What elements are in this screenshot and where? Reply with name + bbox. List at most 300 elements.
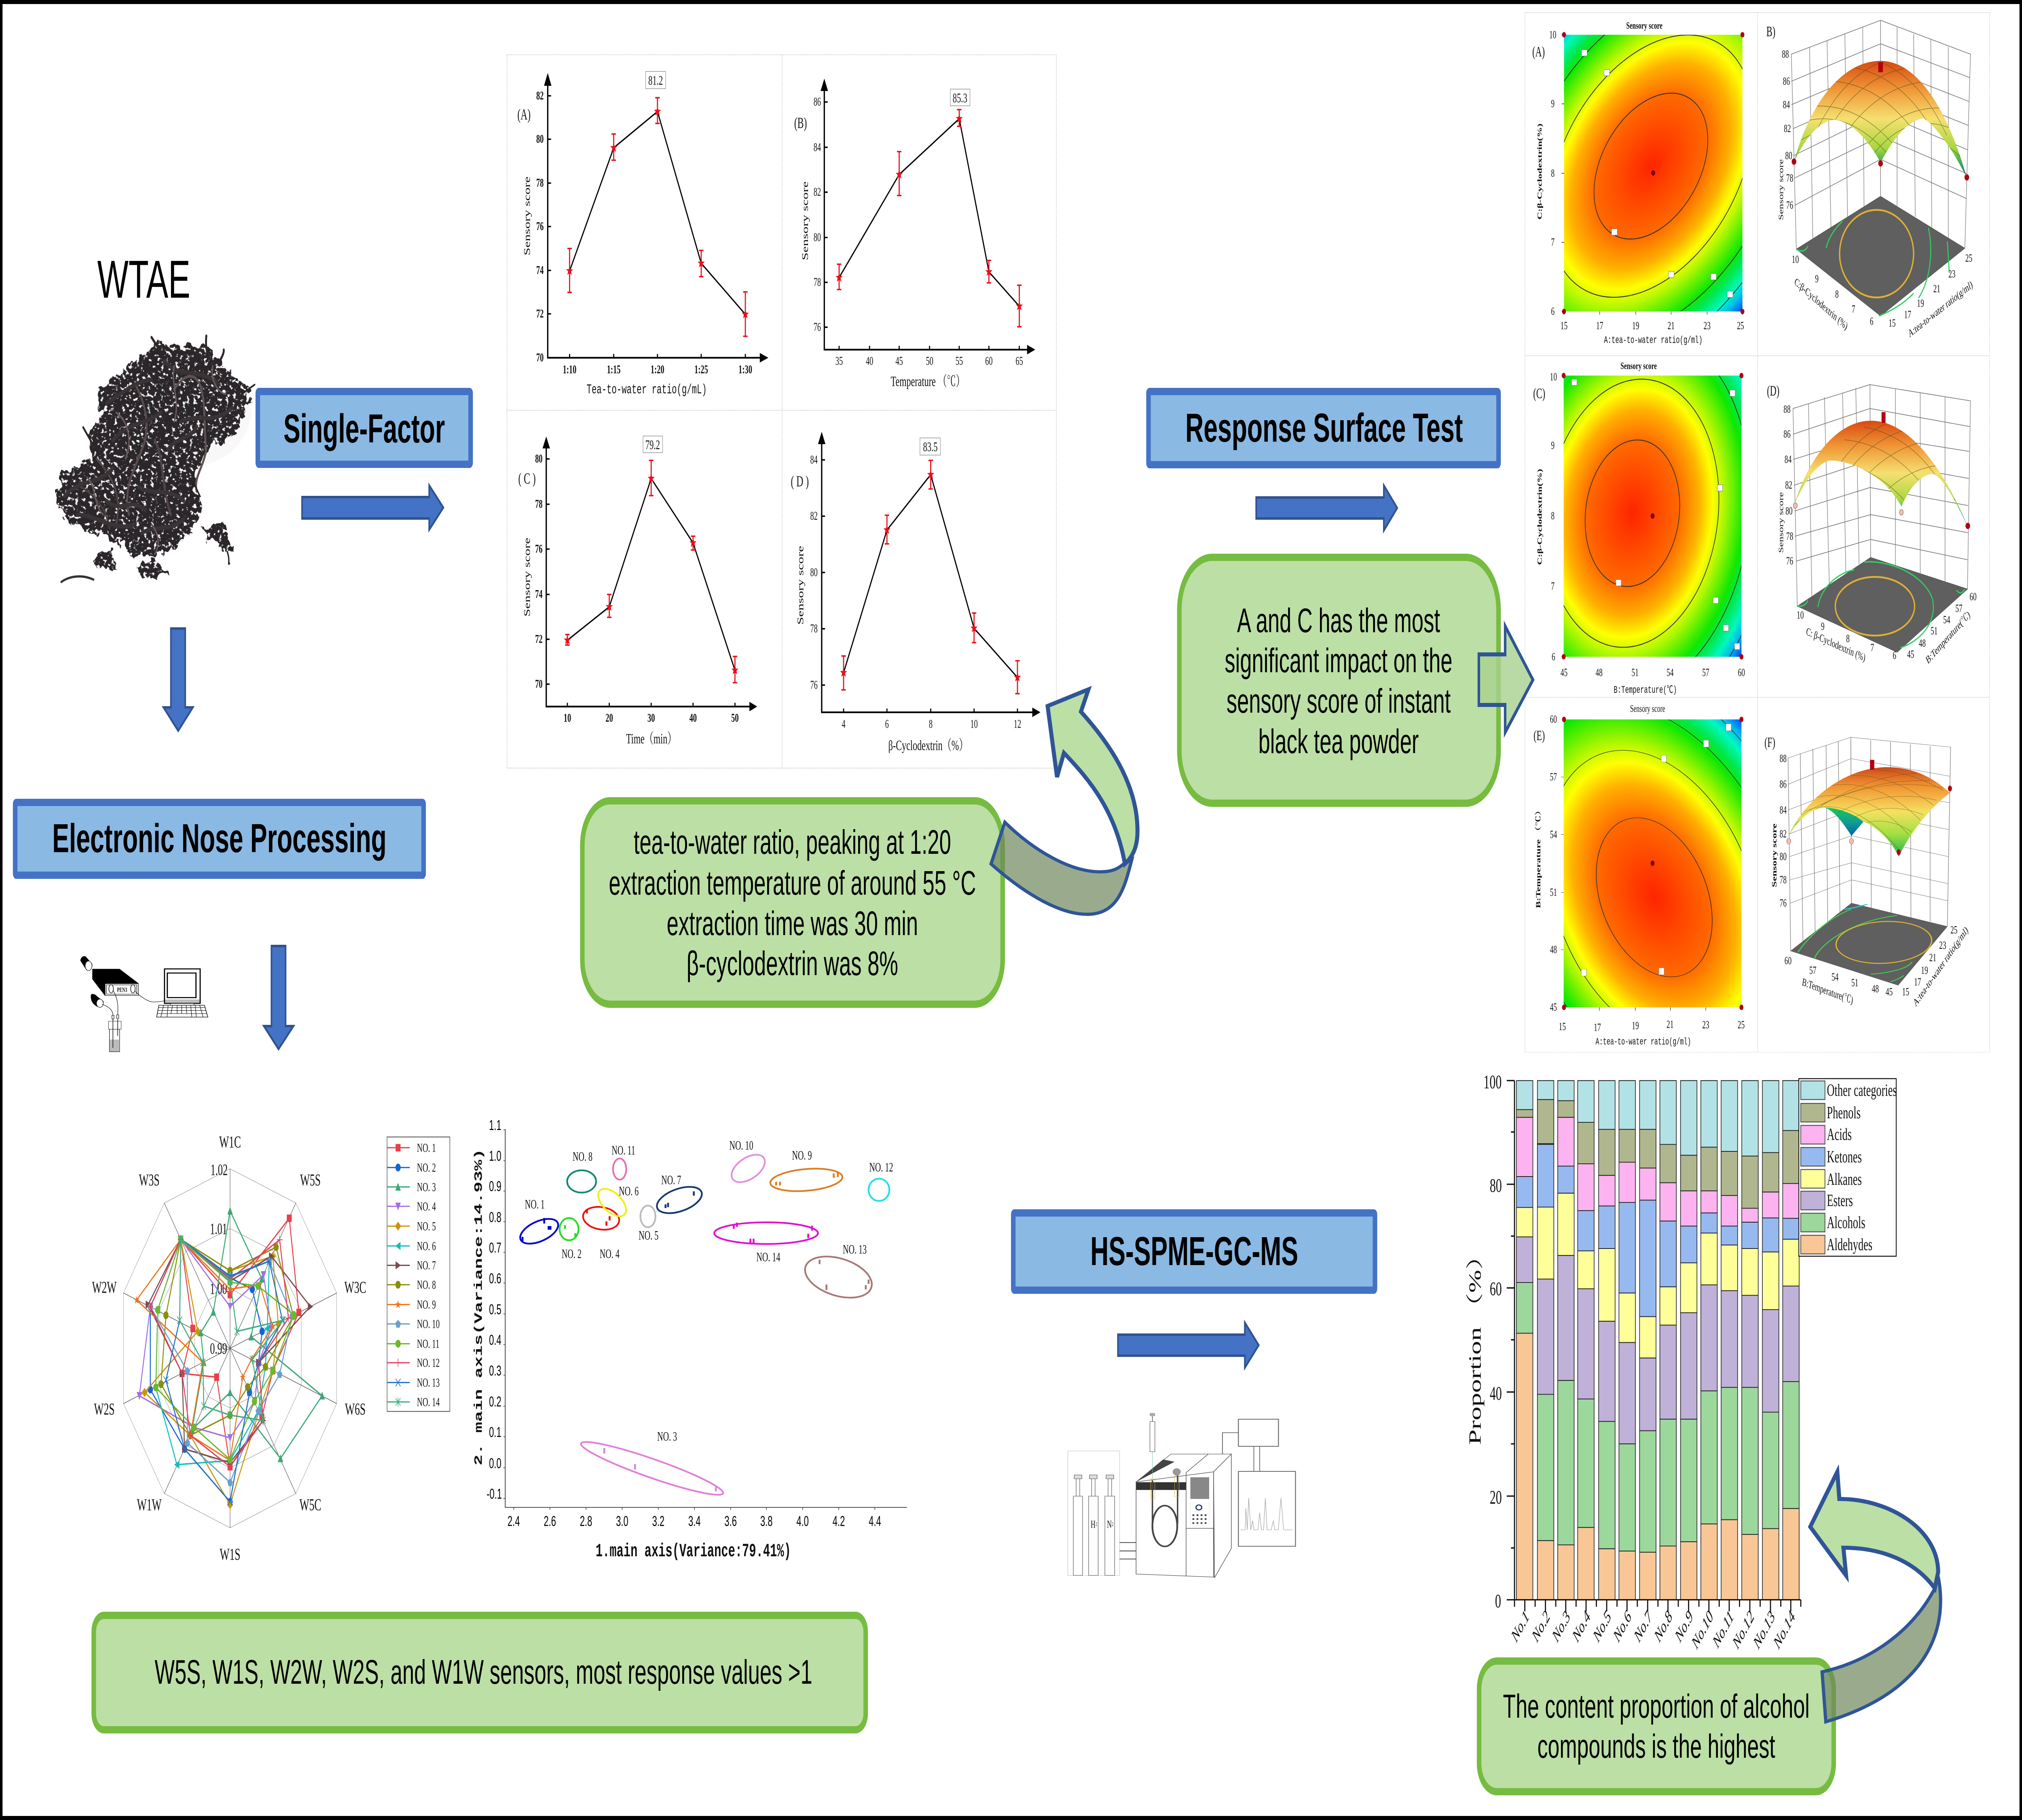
radar chart: electronic nose sensor response: W1W (137, 1496, 162, 1514)
contour plot A: (A) (1532, 44, 1545, 60)
radar chart: electronic nose sensor response: W1C (219, 1133, 241, 1151)
chart: stacked bar of compound proportions: No.5 (1590, 1607, 1614, 1646)
surface plot D: 80 (1785, 505, 1793, 517)
surface plot F: 25 (1950, 924, 1957, 936)
chart: PCA of electronic nose samples: NO. 8 (573, 1149, 592, 1164)
surface plot B: 82 (1784, 122, 1791, 135)
surface plot B (1766, 20, 1972, 330)
surface plot D: (D) (1767, 383, 1779, 399)
surface plot B: 86 (1783, 75, 1790, 87)
contour plot A: 7 (1551, 236, 1555, 249)
contour plot C: B:Temperature(℃) (1614, 685, 1677, 696)
surface plot D: 6 (1893, 649, 1896, 662)
surface plot F: 84 (1780, 804, 1787, 817)
contour plot A: 10 (1549, 28, 1556, 41)
chart: PCA of electronic nose samples: 2.8 (580, 1513, 592, 1529)
chart: PCA of electronic nose samples: NO. 14 (756, 1250, 780, 1264)
chart: PCA of electronic nose samples: 3.4 (688, 1513, 701, 1529)
chart D: beta-cyclodextrin: 76 (810, 679, 818, 692)
surface plot D: 78 (1786, 530, 1793, 543)
callout: response surface finding: black tea powder (1258, 722, 1419, 760)
chart D: beta-cyclodextrin: 6 (885, 717, 889, 731)
chart: PCA of electronic nose samples: NO. 11 (611, 1143, 635, 1158)
chart: stacked bar of compound proportions: No.6 (1610, 1606, 1634, 1646)
chart D: beta-cyclodextrin: 78 (810, 622, 818, 635)
chart: PCA of electronic nose samples: 0.7 (489, 1240, 501, 1256)
surface plot B: 76 (1786, 199, 1793, 212)
surface plot D: 86 (1783, 428, 1791, 440)
contour plot A: 8 (1551, 167, 1555, 180)
arrow: response surface (1256, 485, 1397, 531)
chart: PCA of electronic nose samples: 0.5 (489, 1302, 501, 1318)
radar chart: electronic nose sensor response: 1.01 (210, 1220, 227, 1237)
chart: stacked bar of compound proportions: 80 (1490, 1175, 1502, 1196)
surface plot F: 78 (1780, 874, 1787, 886)
contour plot E: 45 (1550, 1001, 1557, 1014)
legend: radar series: NO. 4 (417, 1199, 436, 1213)
surface plot B: 8 (1835, 288, 1839, 301)
heading: HS-SPME-GC-MS: HS-SPME-GC-MS (1090, 1229, 1298, 1274)
surface plot D: 57 (1955, 602, 1963, 615)
callout: alcohol compounds finding: compounds is the highest (1538, 1727, 1775, 1765)
chart C: time: 74 (535, 588, 543, 601)
surface plot D: 60 (1969, 590, 1977, 603)
chart A: tea-to-water ratio: 1:15 (607, 363, 620, 376)
contour plot A: A:tea-to-water ratio(g/ml) (1604, 335, 1703, 346)
chart A: tea-to-water ratio: 78 (536, 177, 544, 190)
legend: compound categories (1799, 1079, 1897, 1256)
chart: PCA of electronic nose samples: 0.6 (489, 1271, 501, 1287)
radar chart: electronic nose sensor response: W3C (345, 1278, 366, 1297)
chart: stacked bar of compound proportions: No.10 (1689, 1607, 1716, 1653)
chart B: temperature: 82 (814, 186, 821, 199)
contour plot E (1432, 641, 1877, 1154)
chart C: time: Time（min） (626, 731, 676, 747)
chart: PCA of electronic nose samples: 3.0 (616, 1513, 628, 1529)
axis titles for response surface plots: Sensory score (1770, 823, 1778, 887)
legend: radar series: NO. 2 (417, 1160, 436, 1175)
surface plot B: 6 (1870, 315, 1874, 328)
chart: PCA of electronic nose samples: 2. main axis(Variance:14.93%) (473, 1149, 485, 1465)
icon: GC-MS instrument: N2 (1107, 1519, 1114, 1530)
legend: compound categories: Other categories (1827, 1081, 1897, 1100)
chart B: temperature: 78 (814, 276, 821, 289)
surface plot D: 45 (1907, 648, 1914, 661)
surface plot B: 78 (1786, 172, 1793, 184)
chart: stacked bar of compound proportions (1466, 1071, 1897, 1653)
contour plot C: 51 (1631, 666, 1639, 679)
chart A: tea-to-water ratio: (A) (517, 106, 531, 123)
chart: PCA of electronic nose samples: 0.9 (489, 1179, 501, 1194)
contour plot A: 17 (1596, 320, 1603, 332)
legend: compound categories: Acids (1827, 1125, 1852, 1144)
axis titles for response surface plots: C: β-Cyclodextrin (%) (1805, 625, 1866, 664)
contour plot C: 60 (1738, 666, 1745, 679)
callout: sensor finding: W5S, W1S, W2W, W2S, and W1W sensors, most response values >1 (154, 1653, 812, 1691)
chart D: beta-cyclodextrin: ( D ) (791, 473, 809, 490)
surface plot D: 82 (1785, 479, 1792, 491)
chart D: beta-cyclodextrin: 82 (810, 510, 818, 523)
contour plot A: 23 (1704, 320, 1711, 332)
surface plot D (1767, 383, 1977, 662)
legend: radar series: NO. 9 (417, 1297, 436, 1312)
chart B: temperature: 80 (814, 231, 821, 244)
photo: pile of dried tea leaves (57, 336, 255, 582)
contour plot C: 48 (1595, 666, 1603, 679)
panel: single-factor line charts: Sensory score (800, 181, 810, 260)
legend: radar series: NO. 14 (417, 1395, 440, 1409)
icon: PEN3 electronic nose apparatus (80, 956, 208, 1052)
surface plot D: 76 (1786, 555, 1793, 567)
chart: PCA of electronic nose samples (473, 1117, 907, 1562)
chart: PCA of electronic nose samples: NO. 2 (562, 1246, 582, 1261)
chart C: time: 80 (535, 452, 543, 466)
legend: radar series: NO. 6 (417, 1239, 436, 1253)
chart A: tea-to-water ratio: 1:20 (651, 363, 664, 376)
surface plot F: 57 (1809, 964, 1816, 977)
chart: PCA of electronic nose samples: 0.4 (489, 1332, 501, 1348)
chart D: beta-cyclodextrin: 8 (929, 717, 933, 731)
contour plot E: 15 (1559, 1020, 1566, 1033)
chart: stacked bar of compound proportions: No.3 (1549, 1607, 1573, 1646)
surface plot F: 60 (1785, 954, 1791, 967)
surface plot B: 7 (1852, 303, 1855, 315)
chart D: beta-cyclodextrin: 83.5 (923, 439, 938, 454)
panel: single-factor line charts (507, 55, 1056, 768)
chart C: time: 10 (564, 711, 571, 725)
surface plot D: 48 (1919, 637, 1926, 650)
chart A: tea-to-water ratio: 1:10 (563, 363, 576, 376)
panel: response surface plots (1525, 12, 1990, 1052)
chart: stacked bar of compound proportions: 60 (1490, 1278, 1502, 1299)
chart: stacked bar of compound proportions: No.1 (1508, 1607, 1532, 1646)
surface plot B: 23 (1948, 268, 1955, 280)
chart: stacked bar of compound proportions: No.2 (1529, 1607, 1552, 1646)
legend: radar series: NO. 8 (417, 1278, 436, 1292)
callout: alcohol compounds finding: The content proportion of alcohol (1503, 1687, 1810, 1725)
axis titles for response surface plots: C:β-Cyclodextrin (%) (1793, 275, 1849, 332)
surface plot B: 25 (1965, 252, 1972, 265)
chart: PCA of electronic nose samples: NO. 6 (619, 1184, 639, 1198)
contour plot E: 17 (1594, 1021, 1601, 1034)
callout: single-factor findings: β-cyclodextrin was 8% (687, 944, 898, 982)
radar chart: electronic nose sensor response: 1.00 (210, 1280, 227, 1297)
chart: PCA of electronic nose samples: 0.0 (489, 1456, 501, 1471)
chart C: time: 30 (647, 711, 655, 725)
surface plot D: 54 (1943, 614, 1950, 626)
chart: PCA of electronic nose samples: 1.0 (489, 1148, 501, 1164)
chart: PCA of electronic nose samples: 1.1 (489, 1117, 501, 1133)
axis titles for response surface plots: B:Temperature(℃) (1801, 976, 1854, 1006)
surface plot F: 15 (1902, 986, 1909, 998)
surface plot F: 54 (1832, 971, 1839, 984)
contour plot A: 19 (1632, 320, 1639, 332)
chart: PCA of electronic nose samples: 4.2 (833, 1513, 845, 1529)
chart: stacked bar of compound proportions: No.12 (1730, 1607, 1757, 1653)
axis titles for response surface plots: A:tea-to-water ratio(g/ml) (1912, 924, 1969, 1009)
axis titles for response surface plots: A:tea-to-water ratio(g/ml) (1907, 278, 1974, 340)
chart A: tea-to-water ratio: Tea-to-water ratio(g/mL) (587, 383, 707, 398)
chart: PCA of electronic nose samples: NO. 13 (843, 1242, 867, 1257)
chart D: beta-cyclodextrin: 4 (842, 717, 846, 731)
heading: Single-Factor (258, 392, 471, 464)
chart A: tea-to-water ratio: 1:25 (694, 363, 708, 376)
surface plot F: 86 (1780, 778, 1787, 791)
heading: Electronic Nose Processing: Electronic Nose Processing (52, 816, 387, 861)
chart: PCA of electronic nose samples: 0.3 (489, 1363, 501, 1379)
chart: PCA of electronic nose samples: 0.2 (489, 1394, 501, 1410)
contour plot A: 15 (1561, 320, 1567, 332)
radar chart: electronic nose sensor response: W6S (345, 1400, 366, 1418)
chart C: time: ( C ) (518, 470, 536, 487)
chart: PCA of electronic nose samples: 2.6 (544, 1513, 556, 1529)
chart: stacked bar of compound proportions: 20 (1490, 1486, 1502, 1508)
contour plot C: 8 (1551, 510, 1555, 522)
contour plot C: 10 (1550, 370, 1557, 383)
chart A: tea-to-water ratio: 81.2 (648, 72, 663, 88)
arrow: block arrow to response surface plots (1479, 626, 1533, 732)
contour plot A: 6 (1551, 305, 1555, 318)
chart B: temperature: 40 (866, 355, 873, 368)
chart C: time: 79.2 (645, 437, 660, 452)
chart: PCA of electronic nose samples: 0.1 (489, 1424, 501, 1441)
chart: stacked bar of compound proportions: No.14 (1770, 1607, 1798, 1653)
chart: stacked bar of compound proportions: Proportion （%） (1466, 1242, 1485, 1445)
surface plot F (1764, 735, 1957, 998)
chart: stacked bar of compound proportions: 100 (1483, 1071, 1502, 1093)
heading: Single-Factor: Single-Factor (283, 406, 445, 451)
surface plot F: 80 (1780, 850, 1787, 863)
contour plot C: Sensory score (1620, 361, 1657, 371)
chart A: tea-to-water ratio: 1:30 (738, 363, 752, 376)
chart A: tea-to-water ratio: 72 (536, 307, 544, 320)
surface plot B: 10 (1792, 253, 1799, 266)
legend: compound categories: Ketones (1827, 1147, 1862, 1166)
icon: GC-MS instrument: H2 (1091, 1519, 1097, 1530)
contour plot E: 51 (1550, 886, 1557, 899)
callout: response surface finding: significant impact on the (1225, 641, 1453, 679)
radar chart: electronic nose sensor response: W2S (94, 1400, 114, 1418)
arrow: electronic nose to results (264, 946, 294, 1049)
chart: PCA of electronic nose samples: NO. 5 (639, 1228, 658, 1242)
legend: radar series (387, 1137, 450, 1412)
chart D: beta-cyclodextrin: 84 (810, 453, 818, 466)
axis titles for response surface plots: B:Temperature(℃) (1925, 608, 1971, 666)
chart: PCA of electronic nose samples: NO. 10 (730, 1138, 753, 1153)
chart: PCA of electronic nose samples: 2.4 (508, 1513, 520, 1529)
chart: PCA of electronic nose samples: NO. 3 (657, 1429, 677, 1443)
chart: PCA of electronic nose samples: NO. 9 (792, 1148, 812, 1162)
surface plot B: 21 (1933, 283, 1940, 295)
legend: radar series: NO. 1 (417, 1141, 436, 1155)
arrow: HS-SPME-GC-MS (1118, 1323, 1258, 1368)
chart B: temperature: 50 (926, 355, 933, 368)
chart B: temperature: 84 (814, 141, 821, 154)
chart: stacked bar of compound proportions: No.9 (1672, 1607, 1696, 1646)
contour plot E: 25 (1738, 1019, 1745, 1031)
axis titles for response surface plots: Sensory score (1777, 492, 1785, 553)
legend: compound categories: Alkanes (1827, 1170, 1862, 1189)
chart B: temperature (794, 78, 1035, 389)
radar chart: electronic nose sensor response: W5S (300, 1171, 321, 1189)
chart A: tea-to-water ratio: 82 (536, 89, 544, 102)
contour plot A: 9 (1551, 97, 1555, 110)
surface plot F: 82 (1780, 828, 1787, 840)
chart A: tea-to-water ratio: 70 (536, 351, 544, 364)
chart: stacked bar of compound proportions: No.8 (1652, 1607, 1675, 1646)
contour plot C: 45 (1561, 666, 1567, 679)
heading: Response Surface Test (1148, 392, 1499, 465)
chart D: beta-cyclodextrin: 80 (810, 566, 818, 579)
contour plot E: 54 (1550, 828, 1557, 841)
chart: PCA of electronic nose samples: 3.6 (724, 1513, 737, 1529)
surface plot D: 9 (1821, 620, 1825, 633)
panel: single-factor line charts: Sensory score (796, 546, 805, 625)
chart B: temperature: 60 (985, 355, 993, 368)
panel: single-factor line charts: Sensory score (522, 176, 532, 256)
legend: compound categories: Esters (1827, 1191, 1853, 1210)
contour plot C: 7 (1551, 580, 1555, 593)
contour plot A: 25 (1737, 320, 1744, 332)
chart A: tea-to-water ratio: 80 (536, 133, 544, 146)
chart A: tea-to-water ratio (517, 72, 768, 398)
surface plot B: 88 (1782, 48, 1789, 61)
contour plot A (1533, 22, 1745, 345)
chart C: time: 40 (690, 711, 697, 725)
chart: PCA of electronic nose samples: 0.8 (489, 1209, 501, 1225)
chart C: time: 72 (535, 633, 543, 646)
chart D: beta-cyclodextrin (791, 432, 1041, 753)
axis titles for response surface plots: C:β-Cyclodextrin(%) (1536, 123, 1543, 220)
chart B: temperature: 65 (1015, 355, 1023, 368)
contour plot C: 6 (1552, 650, 1555, 663)
surface plot F: (F) (1764, 735, 1775, 751)
surface plot F: 76 (1780, 897, 1787, 910)
callout: response surface finding (1179, 557, 1499, 803)
surface plot F: 48 (1872, 983, 1879, 995)
chart B: temperature: Temperature （℃） (890, 374, 965, 389)
chart A: tea-to-water ratio: 74 (536, 264, 544, 277)
chart: PCA of electronic nose samples: NO. 7 (661, 1172, 681, 1187)
chart C: time: 78 (535, 498, 543, 511)
chart: PCA of electronic nose samples: 1.main axis(Variance:79.41%) (596, 1541, 791, 1562)
chart: stacked bar of compound proportions: No.11 (1710, 1607, 1736, 1652)
chart: PCA of electronic nose samples: 3.2 (652, 1513, 664, 1529)
callout: single-factor findings: extraction temperature of around 55 °C (609, 864, 976, 902)
surface plot B: 84 (1783, 98, 1790, 111)
chart: PCA of electronic nose samples: 4.0 (796, 1513, 809, 1529)
legend: radar series: NO. 10 (417, 1317, 440, 1331)
contour plot E: 23 (1702, 1019, 1709, 1031)
contour plot C: 57 (1702, 666, 1709, 679)
surface plot D: 7 (1870, 641, 1874, 654)
chart: PCA of electronic nose samples: NO. 1 (525, 1197, 545, 1211)
chart: stacked bar of compound proportions: 40 (1490, 1382, 1502, 1404)
axis titles for response surface plots (1535, 123, 1974, 1009)
contour plot C: 9 (1551, 439, 1555, 452)
chart B: temperature: 85.3 (953, 90, 967, 105)
contour plot E: 60 (1550, 713, 1557, 726)
surface plot D: 88 (1783, 403, 1791, 416)
surface plot F: 17 (1914, 976, 1921, 988)
callout: single-factor findings (582, 801, 1003, 1004)
contour plot E: A:tea-to-water ratio(g/ml) (1596, 1037, 1691, 1048)
contour plot E: Sensory score (1630, 704, 1665, 714)
contour plot C: (C) (1533, 385, 1545, 402)
contour plot C: 54 (1667, 666, 1674, 679)
icon: GC-MS instrument (1068, 1413, 1295, 1578)
chart B: temperature: 35 (835, 355, 843, 368)
contour plot E: 19 (1632, 1020, 1639, 1032)
chart C: time (518, 436, 757, 747)
contour plot A: 21 (1667, 320, 1675, 332)
arrow: tea to single-factor (302, 485, 443, 530)
legend: compound categories: Phenols (1827, 1103, 1861, 1122)
chart: stacked bar of compound proportions: 0 (1495, 1590, 1501, 1612)
chart: stacked bar of compound proportions: No.13 (1750, 1607, 1777, 1653)
icon: PEN3 electronic nose apparatus: PEN3 (117, 986, 127, 993)
surface plot D: 84 (1785, 453, 1791, 466)
legend: radar series: NO. 5 (417, 1219, 436, 1233)
chart B: temperature: 45 (895, 355, 903, 368)
surface plot B: 15 (1889, 317, 1896, 330)
axis titles for response surface plots: C:β-Cyclodextrin(%) (1536, 469, 1543, 565)
chart: PCA of electronic nose samples: 4.4 (869, 1513, 881, 1529)
surface plot B: 80 (1785, 149, 1792, 162)
contour plot E: 21 (1667, 1018, 1673, 1031)
chart B: temperature: 55 (956, 355, 963, 368)
radar chart: electronic nose sensor response: W5C (300, 1496, 321, 1514)
surface plot F: 88 (1780, 752, 1787, 765)
chart B: temperature: (B) (794, 114, 807, 131)
surface plot D: 51 (1931, 625, 1937, 637)
chart: PCA of electronic nose samples: NO. 4 (600, 1246, 620, 1261)
contour plot A: Sensory score (1626, 20, 1662, 31)
surface plot B: B) (1766, 23, 1775, 40)
radar chart: electronic nose sensor response: W2W (92, 1278, 117, 1297)
chart C: time: 70 (535, 677, 543, 691)
radar chart: electronic nose sensor response: 1.02 (211, 1161, 228, 1178)
heading: Response Surface Test: Response Surface Test (1185, 405, 1463, 451)
chart: stacked bar of compound proportions: No.7 (1631, 1606, 1655, 1646)
legend: radar series: NO. 12 (417, 1356, 440, 1370)
chart A: tea-to-water ratio: 76 (536, 220, 544, 233)
arrow: tea to electronic nose (163, 629, 193, 731)
callout: response surface finding: sensory score of instant (1227, 682, 1451, 720)
callout: single-factor findings: extraction time was 30 min (667, 904, 918, 942)
title: WTAE: WTAE (97, 250, 190, 309)
arrow: curved from alcohol finding to bar chart (1810, 1472, 1941, 1722)
contour plot C (1533, 362, 1745, 695)
chart B: temperature: 86 (814, 95, 821, 108)
heading: HS-SPME-GC-MS (1013, 1213, 1375, 1290)
radar chart: electronic nose sensor response: W1S (220, 1546, 240, 1564)
legend: compound categories: Alcohols (1827, 1213, 1865, 1232)
axis titles for response surface plots: Sensory score (1777, 159, 1785, 220)
heading: Electronic Nose Processing (15, 802, 424, 875)
callout: alcohol compounds finding (1479, 1661, 1834, 1792)
callout: response surface finding: A and C has the most (1237, 601, 1440, 639)
contour plot E: 57 (1550, 771, 1557, 783)
surface plot F: 19 (1921, 964, 1928, 977)
surface plot B: 19 (1917, 297, 1924, 310)
panel: single-factor line charts: Sensory score (522, 538, 532, 617)
chart: PCA of electronic nose samples: NO. 12 (869, 1160, 893, 1175)
surface plot D: 8 (1846, 633, 1850, 645)
chart C: time: 20 (605, 711, 613, 725)
chart C: time: 76 (535, 542, 543, 556)
surface plot F: 45 (1886, 986, 1893, 998)
